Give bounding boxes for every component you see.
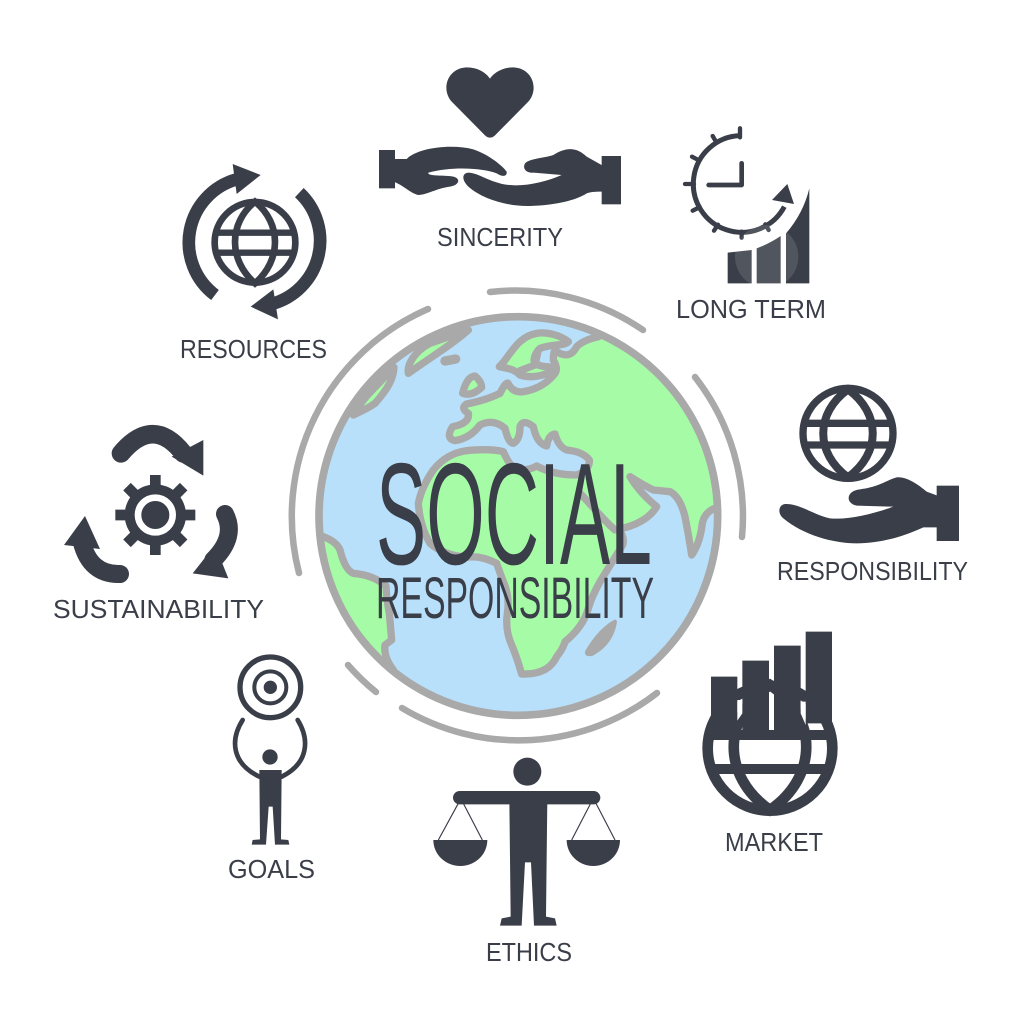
panel: ethics (433, 758, 620, 967)
land: Britain (463, 376, 482, 394)
label: MARKET (725, 829, 823, 857)
panel: resources (180, 164, 327, 364)
label: SUSTAINABILITY (53, 596, 264, 624)
rings around globe (292, 291, 743, 740)
icon: globe on hand (779, 388, 959, 543)
panel: sustainability (53, 434, 264, 624)
icon: clock and rising bars (685, 128, 809, 288)
Baltic gulf line (520, 350, 538, 371)
icon: gear with three arrows (64, 434, 229, 578)
icon: globe with circular arrows (189, 164, 320, 319)
panel: market (708, 632, 832, 857)
panel: goals (228, 657, 315, 884)
land: Greenland (408, 330, 468, 373)
land: Canada (353, 367, 394, 415)
icon: heart and hands (379, 67, 621, 206)
land: South America (324, 533, 397, 670)
Iceland (445, 359, 456, 361)
icon: person with scales (433, 758, 620, 926)
panel: long term (676, 128, 826, 324)
land: Madagascar (587, 622, 615, 654)
icon: person with target (235, 657, 305, 845)
label: ETHICS (486, 939, 572, 967)
title: SOCIAL: SOCIAL (376, 433, 652, 595)
label: LONG TERM (676, 296, 826, 324)
land: Scandinavia (499, 333, 568, 377)
label: SINCERITY (437, 224, 563, 252)
Red Sea line (580, 493, 615, 530)
panel: central globe with rings and title (290, 291, 757, 740)
panel: responsibility (777, 388, 968, 586)
land: Eurasia and Africa (414, 334, 714, 678)
label: RESPONSIBILITY (777, 558, 968, 586)
infographic: social responsibility (54, 67, 968, 962)
globe (315, 312, 722, 720)
label: GOALS (228, 856, 315, 884)
panel: sincerity (379, 67, 621, 252)
icon: bars on globe (708, 632, 832, 811)
label: RESOURCES (180, 336, 327, 364)
title: RESPONSIBILITY: RESPONSIBILITY (376, 566, 654, 631)
